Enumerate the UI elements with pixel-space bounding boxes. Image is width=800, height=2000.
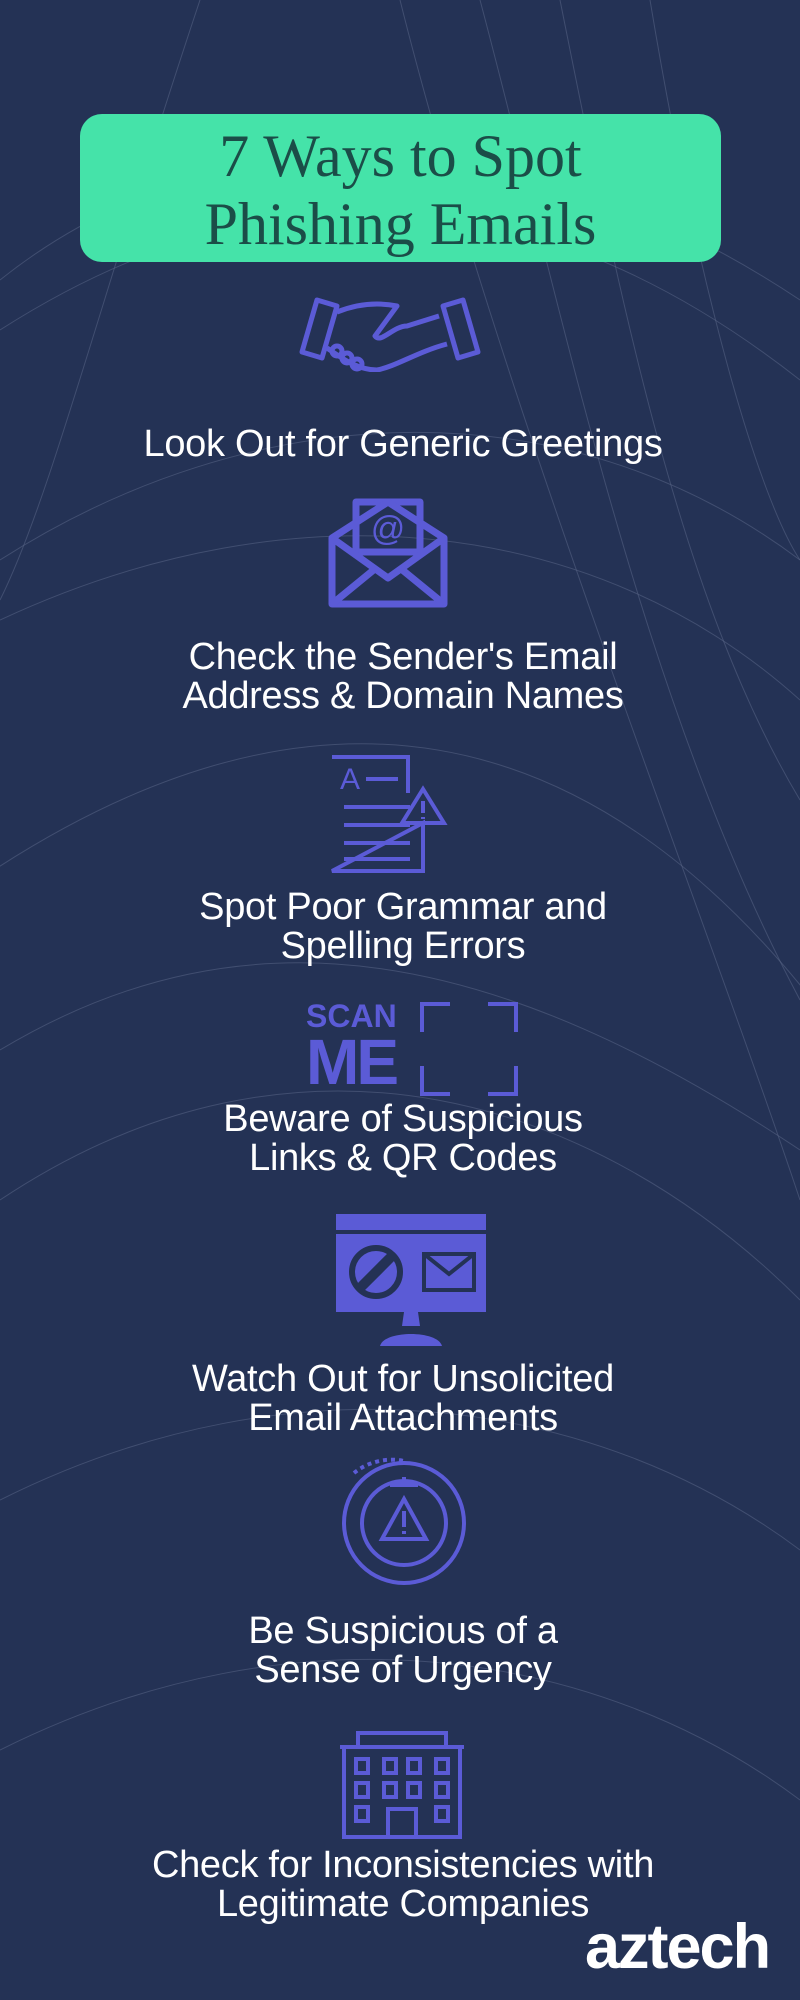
icon: scan me: SCAN xyxy=(306,998,397,1034)
text: step 5: Email Attachments xyxy=(248,1397,558,1439)
icon: handshake xyxy=(300,298,480,372)
title: 7 Ways to Spot xyxy=(219,123,582,189)
title: Phishing Emails xyxy=(205,191,596,257)
icon: monitor xyxy=(336,1214,486,1346)
text: step 2: Check the Sender's Email xyxy=(189,636,617,678)
icon: envelope: @ xyxy=(371,510,405,548)
icon: scan me xyxy=(306,998,518,1098)
text: step 6 xyxy=(248,1610,558,1691)
text: step 5 xyxy=(192,1358,614,1439)
icon: document warning: A xyxy=(340,763,360,796)
text: step 5: Watch Out for Unsolicited xyxy=(192,1358,614,1400)
text: step 3: Spelling Errors xyxy=(281,925,525,967)
text: step 3: Spot Poor Grammar and xyxy=(199,886,607,928)
text: step 2 xyxy=(182,636,624,717)
text: step 7 xyxy=(152,1844,654,1925)
text: step 4 xyxy=(223,1098,583,1179)
icon: document warning xyxy=(331,755,448,873)
text: step 6: Sense of Urgency xyxy=(254,1649,552,1691)
icon: alarm clock xyxy=(342,1458,466,1585)
text: step 6: Be Suspicious of a xyxy=(248,1610,558,1652)
title xyxy=(80,114,721,262)
text: step 1: Look Out for Generic Greetings xyxy=(143,423,663,465)
logo: aztech: aztech xyxy=(585,1912,769,1982)
icon: building xyxy=(340,1731,464,1839)
icon: scan me: ME xyxy=(306,1026,396,1098)
text: step 2: Address & Domain Names xyxy=(182,675,624,717)
text: step 4: Beware of Suspicious xyxy=(223,1098,583,1140)
text: step 4: Links & QR Codes xyxy=(249,1137,557,1179)
icon: envelope xyxy=(328,498,448,608)
text: step 7: Check for Inconsistencies with xyxy=(152,1844,654,1886)
text: step 7: Legitimate Companies xyxy=(217,1883,589,1925)
text: step 3 xyxy=(199,886,607,967)
